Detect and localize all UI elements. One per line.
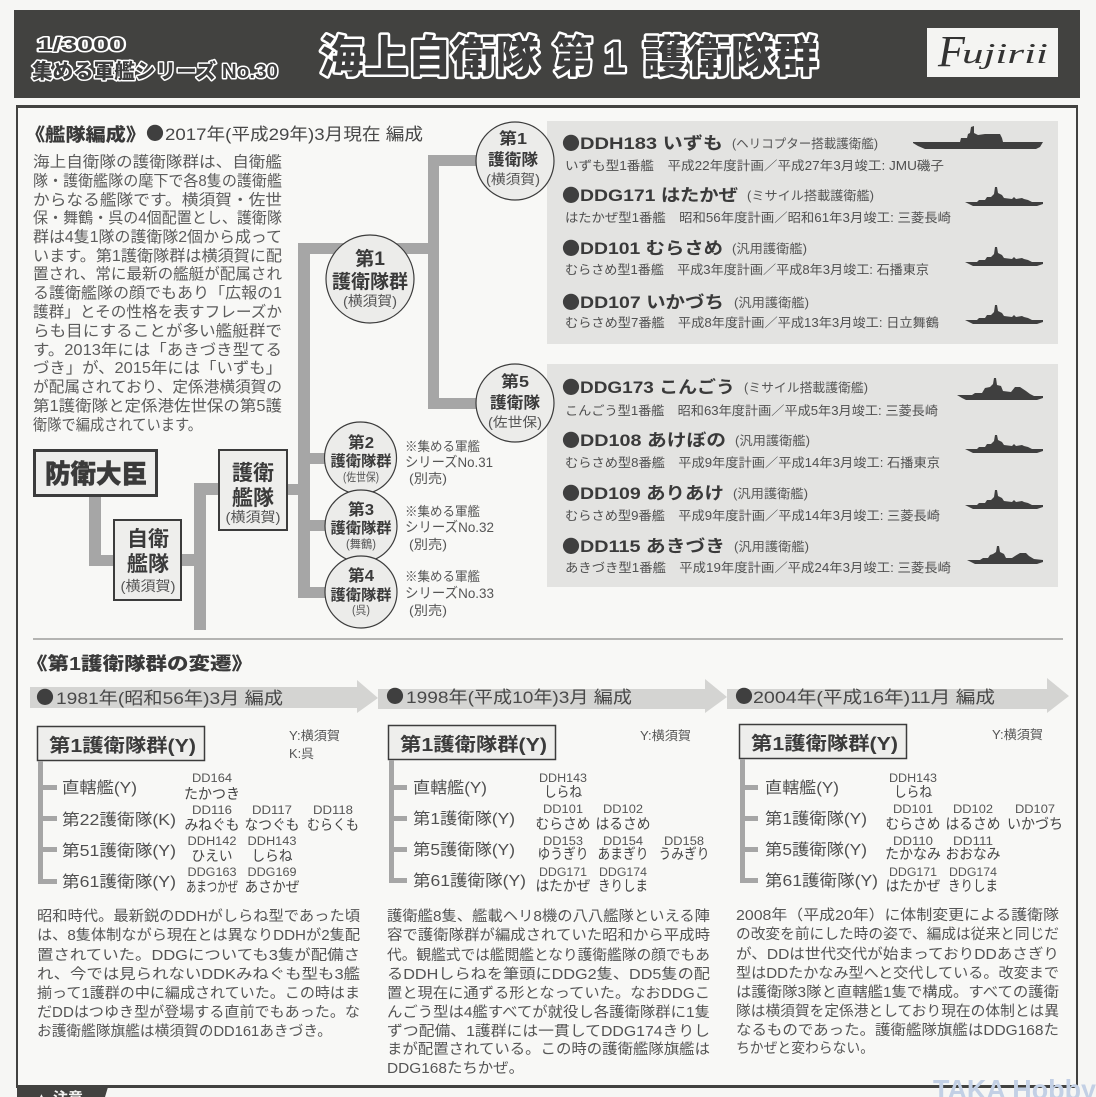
notes: other series numbers: シリーズNo.33 [405, 585, 494, 601]
ship: DD107 [562, 289, 1043, 330]
ship: DD101: DD101 むらさめ [580, 239, 723, 258]
text: 2004 description: 隊は横須賀を定係港としており現在の体制とは異 [736, 1003, 1059, 1020]
arrow: 1981 heading: ● [36, 684, 54, 710]
ship: DD109: DD109 ありあけ [580, 484, 724, 503]
tree: 1981: 第22護衛隊(K) [62, 811, 176, 829]
box: escort fleet [219, 450, 287, 530]
circle: escort flotilla 2 [324, 422, 396, 494]
legend: Y:横須賀 [640, 729, 691, 743]
box: self defense fleet [114, 520, 181, 600]
ships: 1981: DDG169 [248, 867, 296, 879]
ships: 1998: むらさめ [536, 816, 590, 833]
tree: 2004 [740, 759, 878, 890]
caution tab [17, 1087, 108, 1097]
ships: 2004 [885, 773, 1063, 895]
ship: DDG171: (ミサイル搭載護衛艦) [747, 188, 874, 203]
ship: DD108 [562, 427, 1043, 470]
series label: 1/3000 [37, 35, 125, 56]
ships: 1981: DD164 [192, 773, 233, 785]
ship: DD107: (汎用護衛艦) [734, 295, 809, 310]
intro text block: す。2013年には「あきづき型てる [33, 341, 282, 359]
intro text block: 衛隊で編成されています。 [33, 416, 202, 434]
panel: escort division 1 [476, 121, 1058, 344]
text: 1998 description [387, 908, 711, 1077]
notes: other series numbers: シリーズNo.31 [405, 454, 493, 470]
ships: 2004: DD110 [893, 836, 933, 848]
ships: 2004: DDG174 [949, 867, 998, 879]
heading: fleet organisation: 《艦隊編成》 [25, 124, 146, 145]
tree: 2004: 第61護衛隊(Y) [765, 872, 878, 890]
ships: 1998: DDG171 [539, 867, 587, 879]
ships: 1998: DDG174 [599, 867, 648, 879]
ships: 2004: いかづち [1007, 816, 1063, 833]
notes: other series numbers: ※集める軍艦 [405, 504, 480, 519]
ship: DD108: ● [562, 427, 580, 453]
ships: 1981: DD116 [192, 805, 232, 817]
title: 海上自衛隊 [320, 33, 539, 82]
ships: 1998: DDH143 [539, 773, 587, 785]
text: 2004 description: 2008年（平成20年）に体制変更による護衛隊 [736, 907, 1060, 924]
title [320, 33, 818, 82]
circle: escort flotilla 3: 護衛隊群 [330, 519, 392, 537]
circle: escort flotilla 1: 護衛隊群 [332, 271, 408, 293]
tree: 1998: 第1護衛隊(Y) [413, 810, 515, 828]
notes: other series numbers: ※集める軍艦 [405, 569, 480, 584]
ships: 1998: はるさめ [596, 816, 650, 833]
ships: 2004: DD102 [953, 804, 993, 816]
text: 2004 description [736, 907, 1060, 1057]
intro text block [33, 153, 283, 434]
heading: history: 《第1護衛隊群の変遷》 [26, 653, 253, 674]
ship: DD101 [562, 235, 1043, 277]
text: 2004 description: なるものであった。護衛艦隊旗艦はDDG168た [736, 1022, 1059, 1039]
ship: DD115: (汎用護衛艦) [734, 539, 809, 554]
header band [14, 10, 1080, 98]
arrow: 2004 heading: ● [735, 683, 753, 709]
circle: division 1: (横須賀) [486, 172, 540, 187]
ships: 2004: きりしま [948, 878, 998, 895]
ships: 1981: DDG163 [188, 867, 236, 879]
ships: 1981: DDH142 [188, 836, 236, 848]
ship: DDG173: DDG173 こんごう [580, 377, 735, 397]
ships: 2004: はたかぜ [886, 878, 941, 895]
intro text block: る護衛艦隊の顔でもあり「広報の1 [33, 284, 282, 302]
notes: other series numbers [405, 439, 494, 618]
notes: other series numbers: (別売) [409, 537, 447, 552]
box: flotilla 1998 [388, 726, 556, 760]
notes: other series numbers: (別売) [409, 471, 447, 486]
ships: 1981 [184, 773, 359, 896]
box: flotilla 1981 [38, 726, 204, 760]
ship: DDH183 [562, 126, 1043, 173]
circle: division 5: 護衛隊 [490, 393, 540, 412]
ships: 2004: たかなみ [885, 846, 941, 863]
tree: 2004: 直轄艦(Y) [765, 779, 839, 797]
logo [927, 27, 1058, 77]
arrow: 1998 heading [378, 679, 727, 713]
ships: 1981: あまつかぜ [186, 879, 238, 896]
ships: 1998: DD101 [543, 804, 583, 816]
circle: division 5: (佐世保) [488, 415, 542, 430]
ships: 1998: DD154 [603, 836, 644, 848]
notes: other series numbers: ※集める軍艦 [405, 439, 480, 454]
intro text block: 置され、常に最新の艦艇が配属され [33, 265, 283, 283]
ships: 1998: はたかぜ [536, 878, 591, 895]
ships: 2004: DDH143 [889, 773, 937, 785]
ships: 1981: ひえい [192, 849, 232, 865]
title: 護衛隊群 [643, 33, 818, 82]
logo: ujirii [962, 39, 1048, 70]
ships: 1981: あさかぜ [244, 879, 300, 896]
circle: escort flotilla 4 [325, 556, 397, 628]
circle: escort flotilla 4: 第4 [348, 566, 374, 585]
ship: DD101: (汎用護衛艦) [732, 241, 807, 256]
ship: DD109: ● [562, 480, 580, 506]
text: 1981 description: お護衛艦隊旗艦は横須賀のDD161あきづき。 [37, 1023, 332, 1040]
legend: Y:横須賀 [289, 729, 340, 743]
intro text block: 隊・護衛艦隊の麾下で各8隻の護衛艦 [33, 172, 282, 190]
box: flotilla 1981: 第1護衛隊群(Y) [49, 735, 196, 756]
box: flotilla 1998: 第1護衛隊群(Y) [400, 734, 547, 755]
ships: 1998 [536, 773, 710, 895]
ships: 1981: DD118 [313, 805, 353, 817]
ship: DD109: (汎用護衛艦) [733, 486, 808, 501]
ship: DD107: DD107 いかづち [580, 293, 724, 312]
intro text block: づき」が、2015年には「いずも」 [33, 359, 282, 377]
ship: DDG171: DDG171 はたかぜ [580, 186, 738, 205]
text: 1998 description: ずつ配備、1護群には一貫してDDG174きりし [387, 1023, 710, 1040]
text: 1981 description: だDDはつゆき型が登場する直前でもあった。な [37, 1004, 360, 1021]
text: 1998 description: 置と現在に通ずる形となっていた。なおDDGこ [387, 985, 710, 1002]
tree: 1998 [389, 760, 526, 890]
tree: 1998: 直轄艦(Y) [413, 779, 487, 797]
ships: 1998: DD158 [664, 836, 704, 848]
intro text block: らも目にすることが多い艦艇群で [33, 322, 282, 340]
box: self defense fleet: 艦隊 [127, 553, 169, 576]
ships: 2004: むらさめ [886, 816, 940, 833]
legend: K:呉 [289, 747, 314, 761]
ship: DDH183: (ヘリコプター搭載護衛艦) [732, 136, 878, 151]
ship: DD108: むらさめ型8番艦 平成9年度計画／平成14年3月竣工: 石播東京 [565, 455, 940, 470]
ship: DDG171: はたかぜ型1番艦 昭和56年度計画／昭和61年3月竣工: 三菱長崎 [565, 210, 952, 225]
ship: DD109 [562, 480, 1043, 523]
ship: DD115 [562, 533, 1043, 575]
intro text block: います。第1護衛隊群は横須賀に配 [33, 247, 282, 265]
ships: 2004: DD107 [1015, 804, 1055, 816]
logo: F [937, 27, 966, 76]
ships: 2004: はるさめ [946, 816, 1000, 833]
panel: escort division 5 [476, 364, 1058, 587]
heading: fleet organisation: ● [146, 120, 164, 146]
ship: DD101: むらさめ型1番艦 平成3年度計画／平成8年3月竣工: 石播東京 [565, 262, 929, 277]
tree: 1981: 直轄艦(Y) [62, 779, 137, 797]
ships: 2004: DD101 [893, 804, 933, 816]
tree: 1981 [38, 761, 176, 891]
tree: 1981: 第51護衛隊(Y) [62, 842, 176, 860]
ships: 2004: しらね [894, 784, 932, 801]
ship: DDG173: こんごう型1番艦 昭和63年度計画／平成5年3月竣工: 三菱長崎 [565, 403, 939, 418]
text: 1998 description: んごう型は4艦すべてが就役し各護衛隊群に1隻 [387, 1004, 710, 1021]
circle: escort flotilla 2: 第2 [348, 433, 374, 452]
circle: escort flotilla 3: (舞鶴) [346, 537, 376, 551]
ships: 1998: うみぎり [658, 846, 710, 863]
circle: division 1 [476, 122, 554, 200]
box: defense minister [34, 450, 156, 496]
ships: 2004: DD111 [953, 836, 993, 848]
text: 1998 description: まが配置されている。この時の護衛艦隊旗艦は [387, 1041, 710, 1058]
text: 2004 description: が、DDは世代交代が始まっておりDDあさぎり [736, 946, 1059, 963]
ship: DD107: ● [562, 289, 580, 315]
intro text block: 保・舞鶴・呉の4個配置とし、護衛隊 [33, 209, 282, 227]
circle: escort flotilla 1 [326, 235, 414, 323]
text: 1998 description: 護衛艦8隻、艦載ヘリ8機の八八艦隊といえる陣 [387, 908, 710, 925]
ships: 2004: DDG171 [889, 867, 937, 879]
ship: DD108: DD108 あけぼの [580, 431, 726, 450]
intro text block: からなる艦隊です。横須賀・佐世 [33, 191, 282, 209]
circle: escort flotilla 2: (佐世保) [343, 470, 379, 484]
ships: 1981: DDH143 [248, 836, 296, 848]
text: 1981 description: 揃って1護群の中に編成されていた。この時はま [37, 985, 360, 1002]
box: escort fleet: 艦隊 [232, 487, 274, 510]
arrow: 2004 heading [727, 678, 1069, 713]
ships: 1998: DD153 [543, 836, 583, 848]
text: 2004 description: 型はDDたかなみ型へと交代している。改変まで [736, 965, 1059, 982]
legend [289, 729, 340, 761]
circle: escort flotilla 3 [325, 490, 397, 562]
circle: escort flotilla 3: 第3 [348, 500, 374, 519]
intro text block: が配属されており、定係港横須賀の [33, 378, 282, 396]
ship: DDH183: ● [562, 130, 580, 156]
ship: DD109: むらさめ型9番艦 平成9年度計画／平成14年3月竣工: 三菱長崎 [565, 508, 941, 523]
arrow: 1981 heading: 1981年(昭和56年)3月 編成 [56, 689, 283, 708]
circle: escort flotilla 4: (呉) [352, 604, 370, 617]
ship: DD107: むらさめ型7番艦 平成8年度計画／平成13年3月竣工: 日立舞鶴 [565, 315, 940, 330]
column: 2004 [727, 678, 1069, 1057]
ships: 1981: DD117 [252, 805, 292, 817]
notes: other series numbers: (別売) [409, 603, 447, 618]
text: 1998 description: 容で護衛隊群が編成されていた昭和から平成時 [387, 927, 710, 944]
box: self defense fleet: (横須賀) [120, 578, 176, 594]
text: 1981 description [37, 908, 361, 1040]
ship: DD115: ● [562, 533, 580, 559]
tree: 2004: 第1護衛隊(Y) [765, 810, 867, 828]
text: 1998 description: るDDHしらねを筆頭にDDG2隻、DD5隻の配 [387, 966, 711, 983]
circle: escort flotilla 1: 第1 [355, 248, 385, 270]
ship: DDH183: DDH183 いずも [580, 134, 723, 153]
intro text block: 護群」とその性格を表すフレーズか [33, 303, 282, 321]
arrow: 1998 heading: ● [386, 683, 404, 709]
ship: DDG171 [562, 182, 1043, 225]
circle: escort flotilla 2: 護衛隊群 [330, 452, 392, 470]
box: self defense fleet: 自衛 [127, 528, 169, 551]
circle: escort flotilla 4: 護衛隊群 [330, 586, 392, 604]
text: 2004 description: は護衛隊3隊と直轄艦1隻で構成。すべての護衛 [736, 984, 1059, 1001]
arrow: 1981 heading [30, 680, 378, 713]
circle: division 5 [476, 364, 554, 442]
ships: 1998: きりしま [598, 878, 648, 895]
title: 1 [604, 33, 626, 82]
box: flotilla 2004 [740, 724, 906, 758]
ships: 1981: みねぐも [184, 817, 240, 834]
circle: escort flotilla 1: (横須賀) [343, 293, 397, 309]
ships: 2004: おおなみ [946, 846, 1000, 863]
ship: DDG171: ● [562, 182, 580, 208]
box: escort fleet: (横須賀) [226, 509, 280, 525]
ships: 1998: ゆうぎり [538, 846, 588, 863]
circle: division 1: 第1 [499, 129, 527, 148]
circle: division 1: 護衛隊 [488, 150, 538, 169]
tree: 1981: 第61護衛隊(Y) [62, 873, 176, 891]
column: 1981 [30, 680, 378, 1040]
ship: DD115: あきづき型1番艦 平成19年度計画／平成24年3月竣工: 三菱長崎 [565, 560, 952, 575]
circle: division 5: 第5 [501, 372, 529, 391]
text: 1981 description: れ、今では見られないDDKみねぐも型も3艦 [37, 966, 360, 983]
series label: 集める軍艦シリーズ No.30 [32, 59, 278, 83]
ships: 1998: あまぎり [598, 846, 648, 863]
ship: DDG173 [562, 374, 1043, 418]
ship: DDH183: いずも型1番艦 平成22年度計画／平成27年3月竣工: JMU磯子 [565, 158, 944, 173]
arrow: 1998 heading: 1998年(平成10年)3月 編成 [406, 688, 632, 707]
ship: DD108: (汎用護衛艦) [735, 433, 810, 448]
arrow: 2004 heading: 2004年(平成16年)11月 編成 [753, 688, 995, 707]
notes: other series numbers: シリーズNo.32 [405, 519, 494, 535]
box: flotilla 2004: 第1護衛隊群(Y) [751, 733, 898, 754]
ships: 1998: しらね [544, 784, 582, 801]
tree: 2004: 第5護衛隊(Y) [765, 841, 867, 859]
ship: DDG173: (ミサイル搭載護衛艦) [744, 380, 868, 395]
ships: 1998: DD102 [603, 804, 643, 816]
ship: DD115: DD115 あきづき [580, 537, 725, 556]
text: 1981 description: 置されていた。DDGについても3隻が配備さ [37, 947, 360, 964]
intro text block: 第1護衛隊と定係港佐世保の第5護 [33, 397, 282, 415]
ship: DDG173: ● [562, 374, 580, 400]
text: 2004 description: ちかぜと変わらない。 [736, 1040, 874, 1057]
column: 1998 [378, 679, 727, 1077]
ship: DD101: ● [562, 235, 580, 261]
text: 2004 description: の改変を前にした時の姿で、編成は従来と同じだ [736, 926, 1059, 943]
intro text block: 海上自衛隊の護衛隊群は、自衛艦 [33, 153, 282, 171]
legend: Y:横須賀 [992, 728, 1043, 742]
text: 1998 description: 代。観艦式では艦閲艦となり護衛艦隊の顔でもあ [387, 947, 710, 964]
heading: fleet organisation: 2017年(平成29年)3月現在 編成 [165, 125, 423, 144]
text: 1981 description: 昭和時代。最新鋭のDDHがしらね型であった頃 [37, 908, 361, 925]
tree: 1998: 第61護衛隊(Y) [413, 872, 526, 890]
box: escort fleet: 護衛 [232, 462, 274, 485]
series label [32, 35, 278, 83]
text: 1981 description: は、8隻体制ながら現在とは異なりDDHが2隻配 [37, 927, 361, 944]
title: 第 [553, 33, 593, 82]
organisation tree connectors [89, 155, 488, 630]
ships: 1981: たかつき [184, 786, 240, 803]
text: 1998 description: DDG168たちかぜ。 [387, 1060, 524, 1077]
heading: fleet organisation [25, 120, 423, 146]
intro text block: 群は4隻1隊の護衛隊2個から成って [33, 228, 282, 246]
box: defense minister: 防衛大臣 [45, 459, 147, 489]
tree: 1998: 第5護衛隊(Y) [413, 841, 515, 859]
ships: 1981: なつぐも [244, 817, 300, 834]
ships: 1981: しらね [252, 848, 293, 865]
ships: 1981: むらくも [307, 817, 359, 834]
